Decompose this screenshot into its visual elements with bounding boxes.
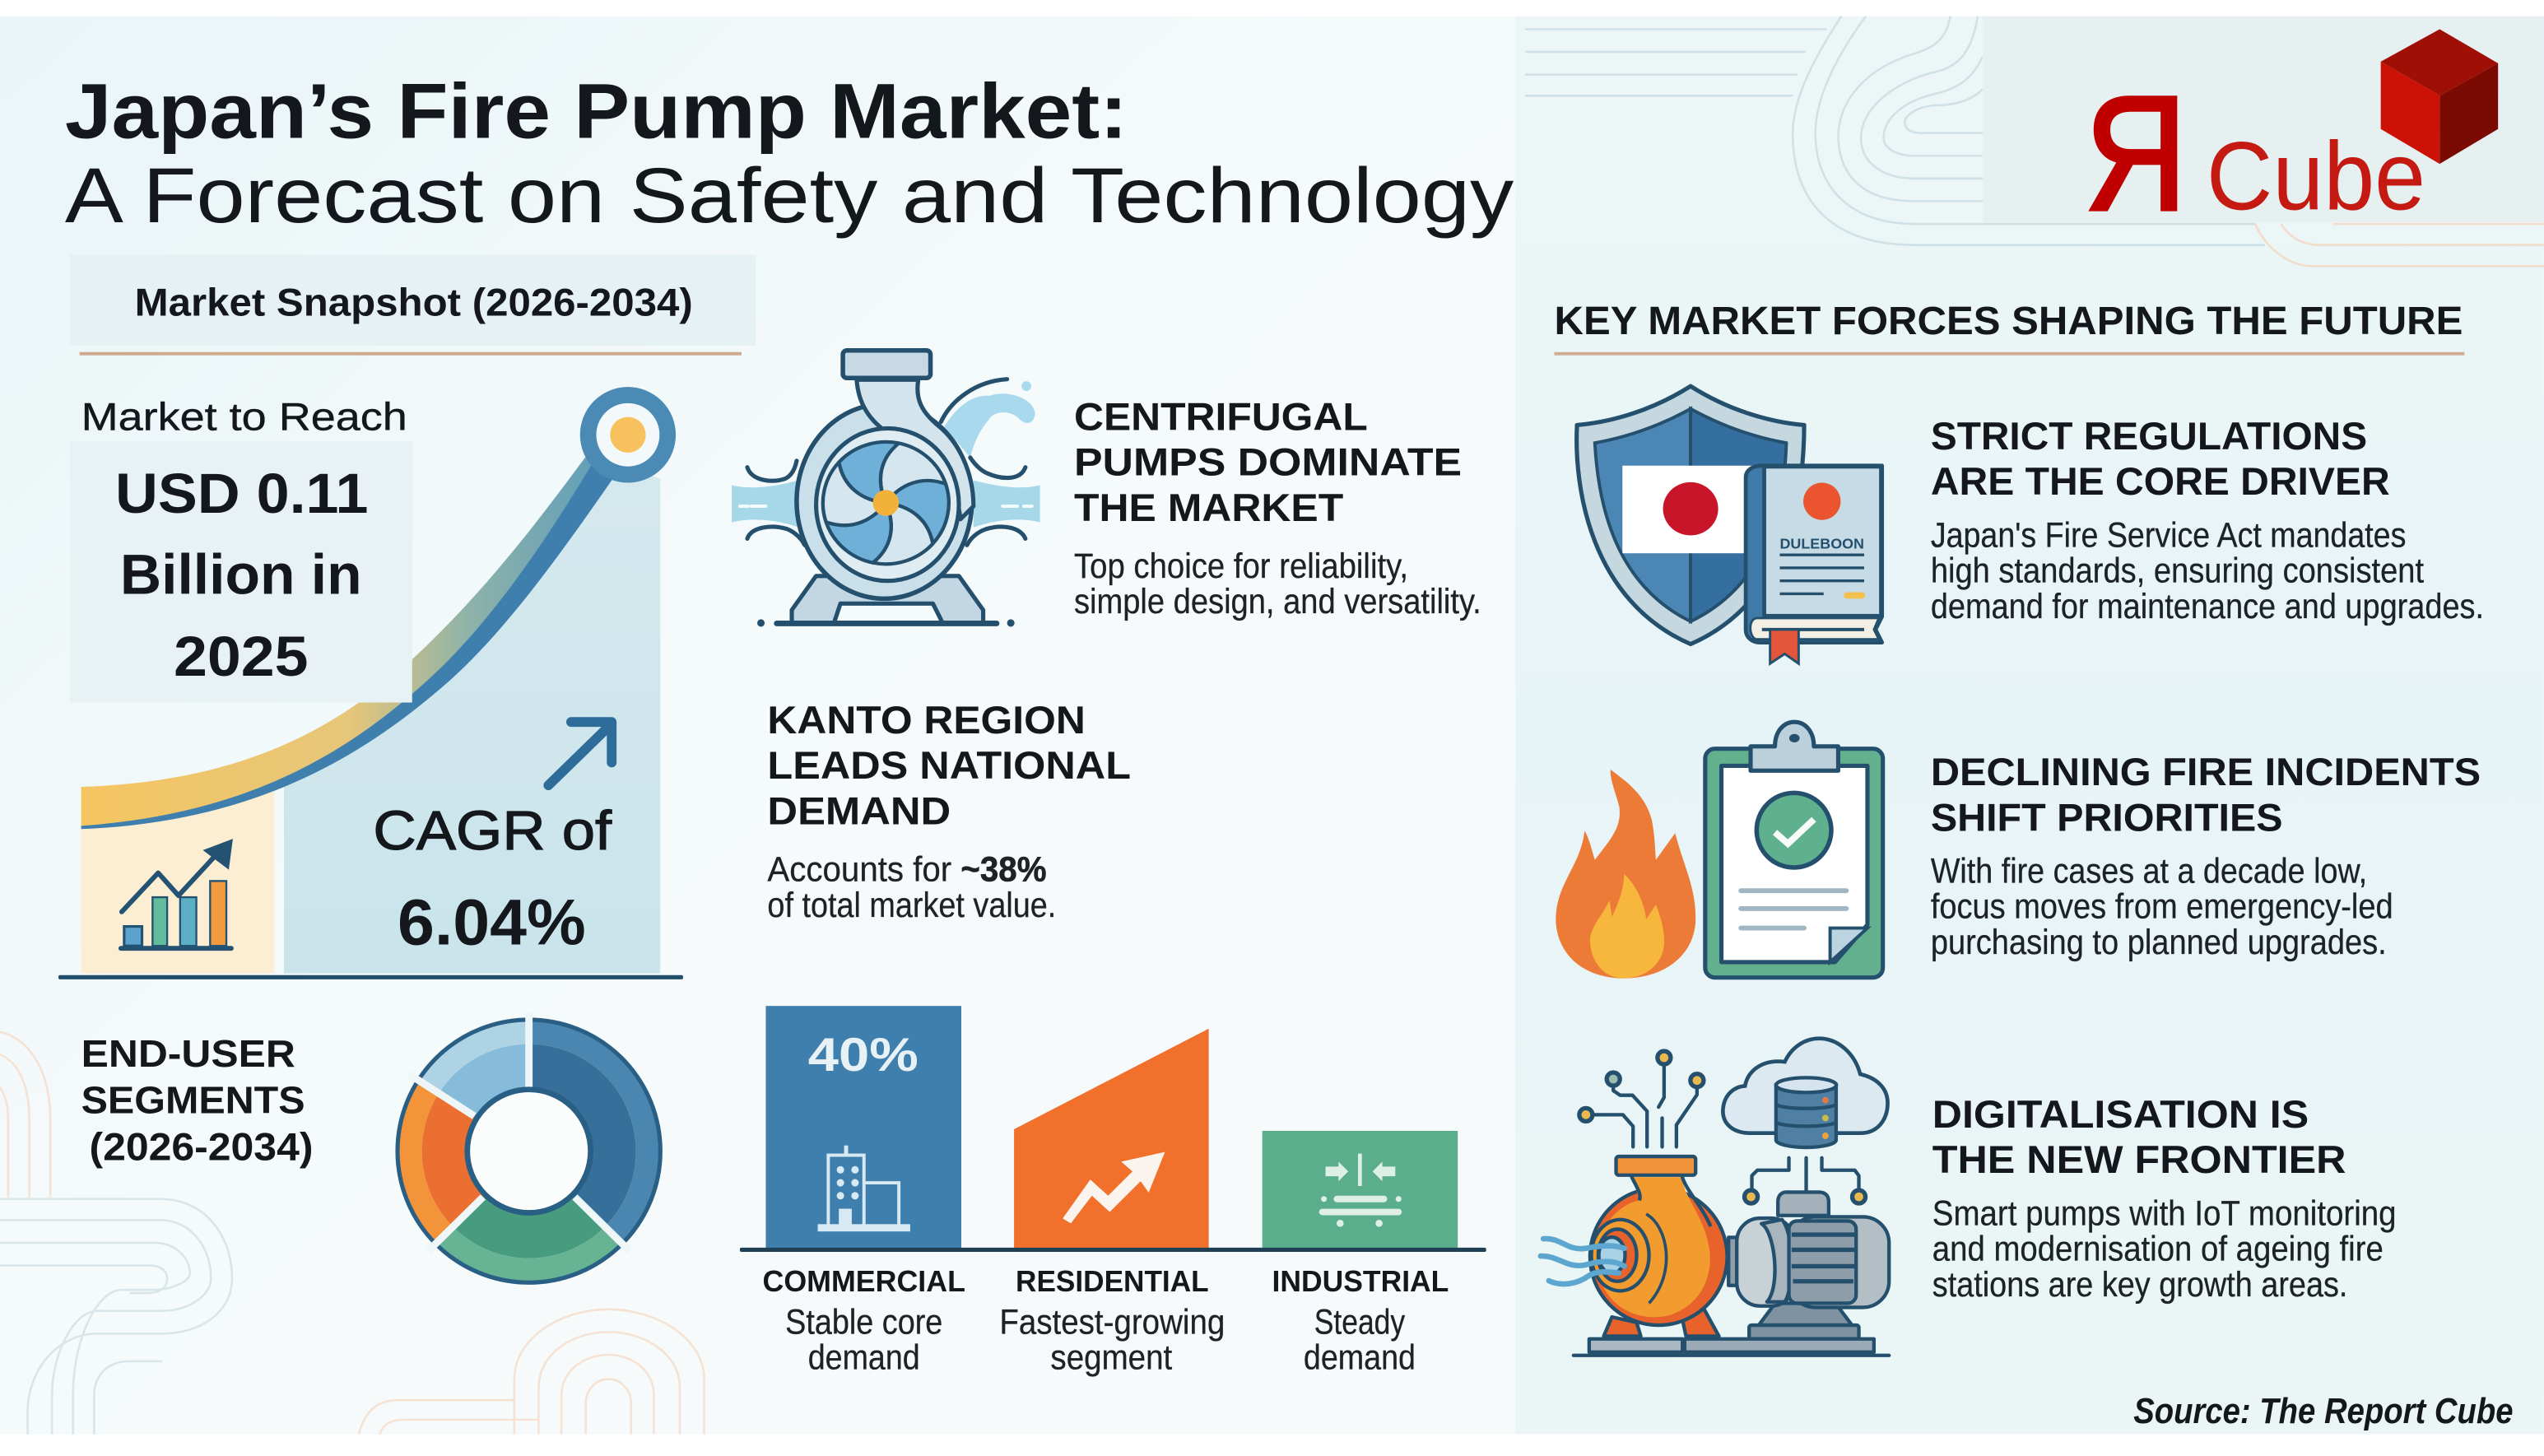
end-user segments heading: SEGMENTS [81, 1078, 305, 1121]
pump baseplate [1574, 1339, 1889, 1356]
market value box: 2025 [174, 625, 309, 688]
pump base [757, 619, 1015, 626]
water jets [732, 379, 1040, 545]
chart icon [119, 839, 234, 951]
text: centrifugal pumps [1074, 395, 1481, 621]
pump discharge neck [857, 379, 974, 519]
label: residential: RESIDENTIAL [1016, 1264, 1209, 1298]
market value box: USD 0.11 [115, 462, 369, 525]
label: industrial: INDUSTRIAL [1272, 1264, 1449, 1298]
text: declining fire incidents: purchasing to planned upgrades. [1931, 923, 2387, 961]
text: strict regulations: high standards, ensuring consistent [1931, 551, 2424, 590]
text: declining fire incidents: DECLINING FIRE INCIDENTS [1931, 751, 2481, 794]
title [65, 68, 1514, 240]
icon: flame [1556, 770, 1695, 979]
text: Kanto region: of total market value. [767, 886, 1056, 924]
text: strict regulations: demand for maintenance and upgrades. [1931, 587, 2484, 626]
logo cube [2381, 29, 2498, 164]
growth chart [58, 395, 683, 979]
water stream [1541, 1239, 1625, 1284]
donut chart [398, 1012, 660, 1282]
label: commercial: COMMERCIAL [763, 1264, 965, 1298]
text: digitalisation: DIGITALISATION IS [1932, 1093, 2309, 1137]
market to reach [70, 395, 412, 703]
icon: building [820, 1146, 909, 1230]
text: digitalisation: Smart pumps with IoT monitoring [1932, 1193, 2397, 1232]
text: strict regulations: Japan's Fire Service Act mandates [1931, 515, 2406, 554]
CAGR text [373, 800, 612, 958]
clipboard clip [1751, 722, 1838, 770]
CAGR text: 6.04% [398, 886, 586, 958]
market value box [70, 441, 412, 703]
text: declining fire incidents: SHIFT PRIORITIES [1931, 796, 2283, 840]
icon: law book [1746, 466, 1882, 663]
database [1776, 1077, 1836, 1147]
text: strict regulations: ARE THE CORE DRIVER [1931, 460, 2390, 504]
text: centrifugal pumps: Top choice for reliability, [1074, 547, 1408, 585]
circuit lines [1579, 1051, 1866, 1203]
check badge [1756, 793, 1831, 868]
text: digitalisation [1932, 1093, 2397, 1304]
pump motor [1728, 1192, 1889, 1339]
bar chart: end-user segments [740, 1006, 1486, 1377]
end-user segments heading: END-USER [81, 1032, 295, 1075]
icon: smart pump with cloud [1541, 1039, 1889, 1356]
key market forces heading: KEY MARKET FORCES SHAPING THE FUTURE [1554, 299, 2463, 343]
text: Kanto region: DEMAND [767, 789, 951, 833]
cloud [1723, 1039, 1888, 1133]
CAGR text: CAGR of [373, 800, 612, 862]
text: Kanto region: Accounts for ~38% [767, 849, 1046, 888]
icon: shield with Japanese flag [1577, 386, 1882, 663]
growth curve line [81, 444, 623, 829]
growth arrow [548, 722, 612, 785]
bar: commercial: 40% [808, 1029, 919, 1082]
icon: rising arrow [1063, 1152, 1165, 1223]
text: centrifugal pumps: CENTRIFUGAL [1074, 395, 1368, 439]
label: commercial: Stable core [785, 1302, 942, 1341]
label: commercial: demand [808, 1338, 920, 1377]
text: centrifugal pumps: simple design, and versatility. [1074, 582, 1481, 621]
market snapshot heading [70, 254, 756, 356]
pump legs [792, 576, 984, 623]
icon: law book: DULEBOON [1780, 535, 1864, 551]
text: Kanto region: LEADS NATIONAL [767, 744, 1131, 788]
text: Kanto region [767, 699, 1131, 924]
curve end node [588, 395, 667, 475]
icon: centrifugal pump [732, 351, 1040, 626]
logo panel [1983, 16, 2544, 244]
label: industrial: demand [1304, 1338, 1416, 1377]
text: digitalisation: and modernisation of ageing fire [1932, 1230, 2384, 1268]
growth curve band [81, 441, 616, 827]
market to reach: Market to Reach [81, 395, 407, 439]
icon: clipboard checklist [1705, 722, 1883, 978]
label: residential: segment [1050, 1338, 1172, 1377]
bar: residential [1014, 1029, 1209, 1249]
text: declining fire incidents: With fire cases at a decade low, [1931, 851, 2367, 890]
market snapshot heading: Market Snapshot (2026-2034) [135, 281, 693, 324]
label: industrial: Steady [1314, 1302, 1406, 1341]
pump casing orange [1590, 1156, 1728, 1336]
label: residential [999, 1264, 1225, 1377]
text: centrifugal pumps: THE MARKET [1074, 486, 1343, 530]
label: residential: Fastest-growing [999, 1302, 1225, 1341]
text: declining fire incidents: focus moves from emergency-led [1931, 887, 2393, 926]
label: commercial [763, 1264, 965, 1377]
text: declining fire incidents [1931, 751, 2481, 961]
pump casing [797, 404, 972, 598]
title: A Forecast on Safety and Technology [65, 152, 1514, 240]
text: digitalisation: THE NEW FRONTIER [1932, 1138, 2346, 1182]
logo wordmark: Я [2085, 63, 2187, 244]
pump flange [843, 351, 931, 378]
text: strict regulations: STRICT REGULATIONS [1931, 415, 2367, 458]
text: strict regulations [1931, 415, 2484, 626]
impeller [802, 423, 970, 584]
logo wordmark: Cube [2207, 122, 2425, 230]
end-user segments heading: (2026-2034) [89, 1125, 313, 1169]
text: Kanto region: KANTO REGION [767, 699, 1086, 742]
title: Japan’s Fire Pump Market: [65, 68, 1128, 156]
bar: commercial [765, 1006, 961, 1249]
end-user segments heading [81, 1032, 313, 1169]
bar: industrial [1263, 1131, 1458, 1249]
text: digitalisation: stations are key growth areas. [1932, 1265, 2347, 1304]
market value box: Billion in [120, 542, 362, 606]
text: centrifugal pumps: PUMPS DOMINATE [1074, 441, 1462, 485]
logo wordmark [2085, 63, 2425, 244]
icon: balance [1319, 1154, 1402, 1227]
label: industrial [1272, 1264, 1449, 1377]
